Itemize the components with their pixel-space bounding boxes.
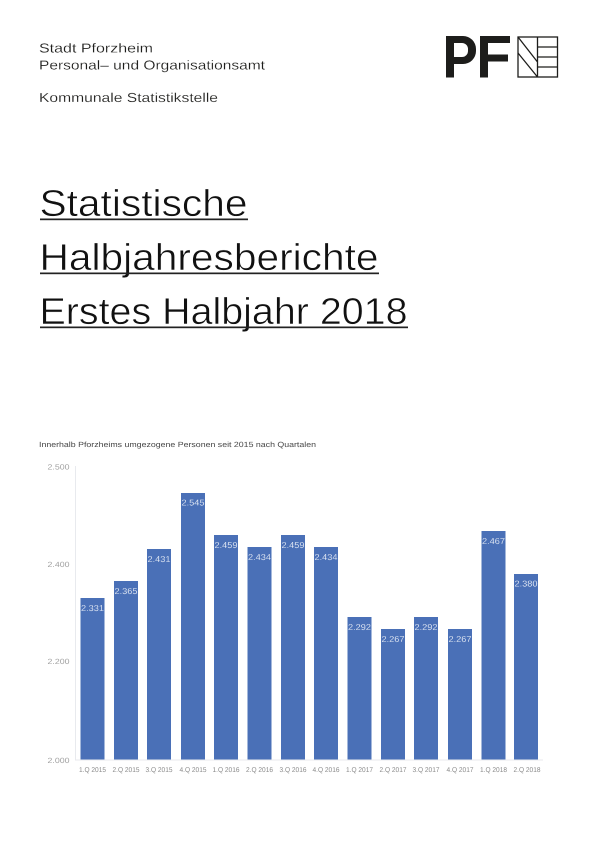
x axis quarter labels: 3.Q 2015 — [146, 767, 173, 774]
y axis labels: 2.400 — [48, 560, 70, 569]
header: organisation text: Kommunale Statistikstelle — [39, 90, 218, 105]
bar value labels: 2.292 — [348, 622, 371, 632]
x axis quarter labels: 2.Q 2018 — [514, 767, 541, 774]
x axis quarter labels: 1.Q 2017 — [346, 767, 373, 774]
bars — [80, 493, 538, 760]
bar value labels: 2.380 — [514, 578, 538, 588]
x axis quarter labels: 4.Q 2016 — [312, 767, 340, 774]
y axis labels: 2.500 — [48, 462, 70, 472]
x axis quarter labels: 4.Q 2017 — [446, 767, 474, 774]
y axis labels: 2.200 — [48, 657, 70, 666]
y axis labels: 2.000 — [48, 756, 70, 765]
title — [40, 182, 408, 332]
bar value labels: 2.431 — [148, 554, 171, 564]
title: Statistische — [40, 182, 248, 224]
bar value labels: 2.545 — [182, 498, 205, 508]
title: Erstes Halbjahr 2018 — [40, 290, 408, 332]
bar value labels: 2.459 — [282, 540, 305, 550]
bar value labels: 2.434 — [314, 552, 338, 562]
x axis quarter labels: 3.Q 2017 — [412, 767, 440, 774]
bar value labels — [81, 498, 538, 644]
bar value labels: 2.365 — [114, 586, 138, 596]
y axis labels — [48, 462, 70, 765]
bar value labels: 2.459 — [214, 540, 238, 550]
chart: bar chart of relocations per quarter — [48, 462, 543, 774]
bar value labels: 2.267 — [382, 634, 405, 644]
chart title: Innerhalb Pforzheims umgezogene Personen seit 2015 nach Quartalen — [39, 440, 316, 449]
x axis quarter labels: 2.Q 2016 — [246, 767, 273, 774]
bar value labels: 2.292 — [414, 622, 438, 632]
x axis quarter labels: 4.Q 2015 — [180, 767, 207, 774]
chart axes — [75, 466, 543, 760]
logo: PF with emblem — [446, 36, 558, 78]
title: Halbjahresberichte — [40, 236, 378, 278]
bar value labels: 2.331 — [81, 603, 104, 613]
bar value labels: 2.467 — [482, 536, 505, 546]
header: organisation text: Stadt Pforzheim — [39, 40, 153, 56]
bar value labels: 2.267 — [448, 634, 472, 644]
bar value labels: 2.434 — [248, 552, 271, 562]
x axis quarter labels — [79, 767, 541, 774]
header: organisation text: Personal– und Organisationsamt — [39, 58, 265, 72]
x axis quarter labels: 1.Q 2016 — [212, 767, 240, 774]
x axis quarter labels: 3.Q 2016 — [280, 767, 307, 774]
header: organisation text — [39, 40, 265, 105]
x axis quarter labels: 2.Q 2015 — [112, 767, 140, 774]
x axis quarter labels: 1.Q 2018 — [480, 767, 507, 774]
x axis quarter labels: 2.Q 2017 — [380, 767, 407, 774]
x axis quarter labels: 1.Q 2015 — [79, 767, 106, 774]
